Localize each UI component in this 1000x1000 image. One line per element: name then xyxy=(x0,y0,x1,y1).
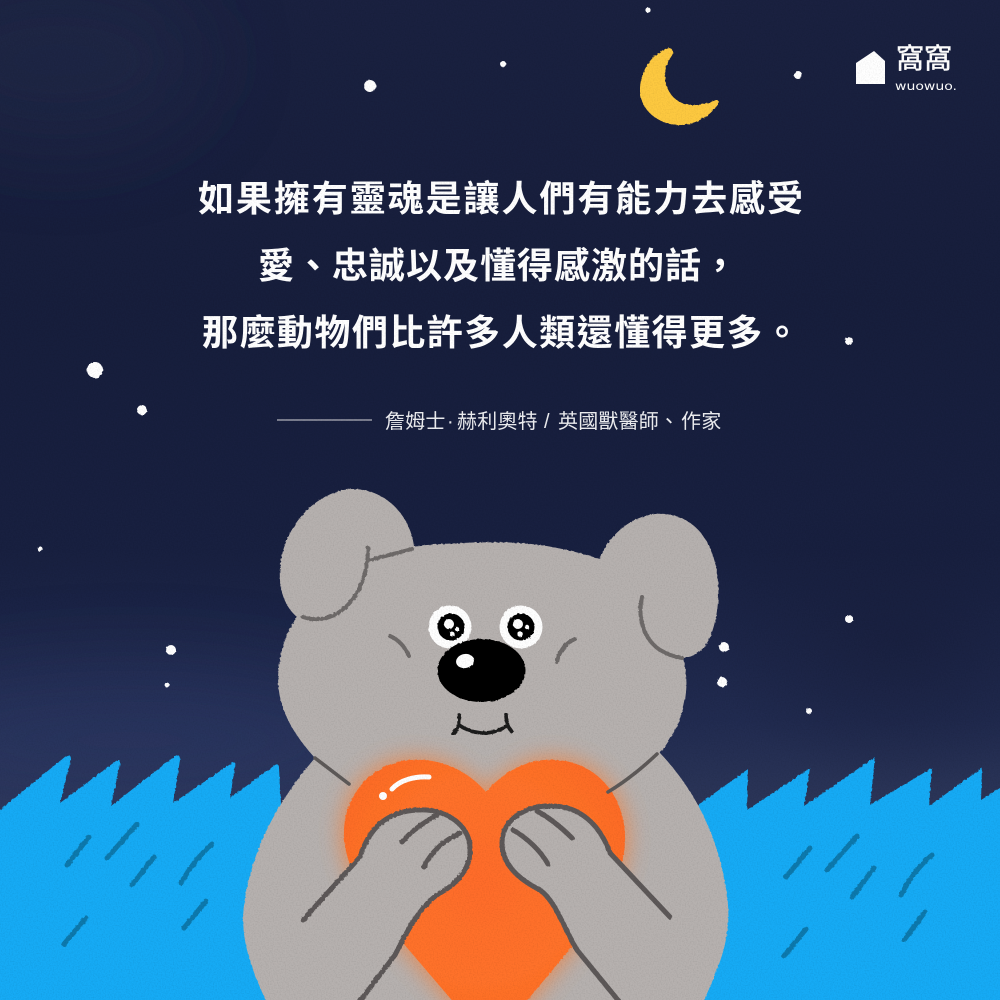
left eye xyxy=(428,606,472,648)
attribution text: / xyxy=(544,411,550,433)
attribution text: 赫利奧特 xyxy=(457,410,538,433)
icon: crescent moon xyxy=(640,48,719,125)
attribution text: 詹姆士 xyxy=(385,410,446,433)
quote line 2: 愛、忠誠以及懂得感激的話， xyxy=(258,245,738,286)
heart glow xyxy=(341,757,628,1000)
nose xyxy=(438,639,526,702)
heart xyxy=(344,760,625,1000)
water waves xyxy=(0,755,1000,1000)
quote text xyxy=(198,178,803,353)
attribution text: · xyxy=(447,411,454,433)
rain strokes xyxy=(64,824,932,956)
icon: house xyxy=(856,51,885,84)
smile xyxy=(453,714,512,734)
bear illustration xyxy=(243,489,728,1000)
right eye xyxy=(500,606,542,648)
heart shine xyxy=(379,777,429,800)
attribution xyxy=(277,410,721,433)
right paw xyxy=(502,806,710,1000)
ear and cheek lines xyxy=(303,548,682,662)
attribution text: 英國獸醫師、 xyxy=(558,410,679,433)
stars xyxy=(37,7,853,714)
logo characters: 窩窩 xyxy=(896,43,952,74)
logo wordmark: wuowuo. xyxy=(895,79,957,93)
attribution text: 作家 xyxy=(681,410,721,433)
left paw xyxy=(270,810,470,1000)
bear silhouette xyxy=(243,489,728,1000)
quote line 3: 那麼動物們比許多人類還懂得更多。 xyxy=(202,312,800,353)
logo: wuowuo xyxy=(856,43,957,93)
quote line 1: 如果擁有靈魂是讓人們有能力去感受 xyxy=(198,178,803,219)
neck lines xyxy=(315,754,657,792)
